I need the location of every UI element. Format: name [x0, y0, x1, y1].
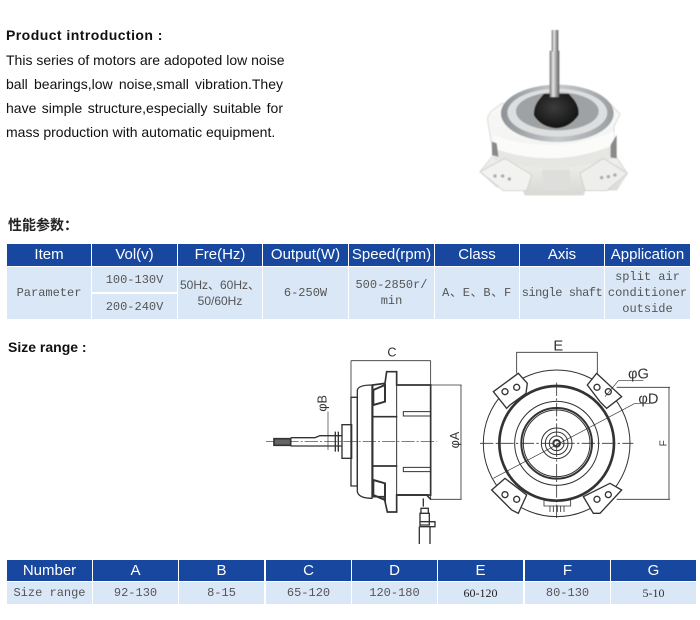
- table: size range: G: [648, 562, 659, 579]
- labels: E: [553, 339, 563, 355]
- table: performance parameters: split air conditioner outside: [608, 270, 687, 316]
- heading: size range: Size range :: [8, 339, 87, 355]
- table: performance parameters: Axis: [548, 246, 576, 263]
- labels: φB: [316, 395, 330, 412]
- heading: product introduction: Product introduction :: [6, 27, 163, 43]
- labels: F: [659, 440, 670, 446]
- table: performance parameters: Class: [458, 246, 496, 263]
- table: size range: E: [475, 562, 486, 579]
- table: performance parameters: Vol(v): [115, 246, 154, 263]
- table: performance parameters: Item: [34, 246, 64, 263]
- table: size range: 80-130: [546, 586, 589, 600]
- table: size range: 120-180: [369, 586, 420, 600]
- table: performance parameters: A、E、B、F: [442, 286, 512, 300]
- table: performance parameters: Speed(rpm): [352, 246, 431, 263]
- table: size range: Size range: [13, 586, 86, 600]
- text block: product description: ball bearings,low noise,small vibration.They: [6, 76, 283, 92]
- text block: product description: This series of motors are adopoted low noise: [6, 52, 285, 68]
- labels: [553, 339, 670, 446]
- bearing boot: [534, 94, 578, 128]
- table: size range: 60-120: [464, 586, 498, 600]
- table: performance parameters: Output(W): [271, 246, 340, 263]
- table: size range: D: [389, 562, 400, 579]
- labels: C: [387, 346, 396, 360]
- labels: φA: [448, 431, 462, 448]
- table: performance parameters: single shaft: [522, 286, 602, 300]
- table: size range: 65-120: [287, 586, 330, 600]
- labels: [316, 346, 462, 448]
- text block: product description: have simple structure,especially suitable for: [6, 100, 283, 116]
- table: performance parameters: Fre(Hz): [195, 246, 245, 263]
- heading: performance parameters: 性能参数：: [8, 217, 78, 233]
- labels: φD: [638, 391, 658, 407]
- table: size range: F: [563, 562, 572, 579]
- table: performance parameters: 200-240V: [106, 300, 163, 314]
- table: size range: 92-130: [114, 586, 157, 600]
- table: performance parameters: 500-2850r/ min: [355, 278, 428, 308]
- table: performance parameters: 6-250W: [284, 286, 327, 300]
- table: performance parameters: [7, 244, 690, 319]
- labels: φG: [628, 367, 649, 383]
- table: size range: 5-10: [642, 586, 664, 600]
- table: performance parameters: 100-130V: [106, 272, 163, 286]
- table: size range: B: [216, 562, 226, 579]
- text block: product description: [6, 52, 285, 140]
- table: performance parameters: Parameter: [17, 286, 81, 300]
- shaft: [550, 51, 559, 97]
- table: size range: C: [303, 562, 314, 579]
- table: performance parameters: 50Hz、60Hz、 50/60Hz: [180, 278, 260, 308]
- table: performance parameters: Application: [611, 246, 684, 263]
- table: size range: [7, 560, 696, 604]
- table: size range: Number: [23, 562, 76, 579]
- text block: product description: mass production with automatic equipment.: [6, 124, 275, 140]
- table: size range: 8-15: [207, 586, 236, 600]
- table: size range: A: [130, 562, 140, 579]
